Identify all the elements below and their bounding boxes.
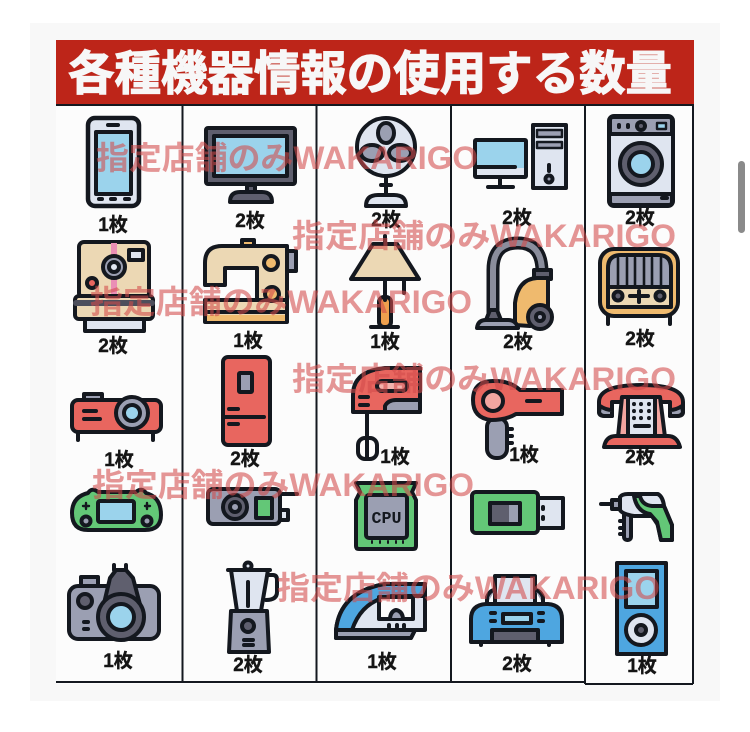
quantity labels: 2枚 [371,209,401,231]
quantity labels: 2枚 [98,335,128,357]
icon: vacuum cleaner [477,243,552,329]
panel: device grid [56,104,694,684]
quantity labels: 1枚 [103,650,133,672]
quantity labels: 2枚 [502,207,532,229]
icon: smartphone [88,118,139,206]
quantity labels: 1枚 [104,449,134,471]
icon: SLR camera [69,565,159,640]
icon: television [206,128,295,202]
quantity labels: 2枚 [502,653,532,675]
icon: desktop computer [475,125,566,188]
quantity labels: 1枚 [627,655,657,677]
icon: refrigerator [223,357,270,445]
icon: hair dryer [473,381,562,458]
icon: sewing machine [205,240,296,322]
icon: vintage radio [600,249,678,324]
icon: power drill [601,494,672,540]
watermarks: 指定店舗のみWAKARIGO [90,284,472,320]
quantity labels [98,207,657,677]
quantity labels: 2枚 [625,328,655,350]
watermarks: 指定店舗のみWAKARIGO [292,361,676,397]
title banner: 各種機器情報の使用する数量 [68,47,672,100]
watermarks: 指定店舗のみWAKARIGO [292,218,676,254]
quantity labels: 1枚 [98,214,128,236]
quantity labels: 1枚 [233,330,263,352]
icon: USB drive [472,492,563,533]
icon: instant camera [75,242,153,331]
quantity labels: 2枚 [233,654,263,676]
icon: clothes iron [336,584,425,638]
quantity labels: 1枚 [370,331,400,353]
icon: washing machine [609,116,673,206]
icon: printer [471,576,562,645]
watermarks: 指定店舗のみWAKARIGO [96,140,478,176]
quantity labels: 2枚 [230,448,260,470]
icon: desk telephone [599,385,683,447]
icon: CPU chip: CPU [372,510,402,529]
icon: blender [228,562,277,652]
icon: hand mixer [353,368,420,459]
icon: handheld game console [72,490,161,530]
watermarks: 指定店舗のみWAKARIGO [92,467,474,503]
icon: table lamp [351,236,419,327]
quantity labels: 2枚 [503,331,533,353]
quantity labels: 2枚 [625,446,655,468]
quantity labels: 2枚 [625,207,655,229]
icon: music player [617,563,666,654]
icon: camcorder [208,489,297,524]
scrollbar [738,161,745,233]
watermarks: 指定店舗のみWAKARIGO [277,570,660,606]
quantity labels: 1枚 [509,444,539,466]
watermarks [90,140,676,606]
quantity labels: 1枚 [380,446,410,468]
icon: electric fan [357,118,415,206]
quantity labels: 1枚 [367,651,397,673]
icon: projector [72,394,161,440]
icon: CPU chip [356,483,416,549]
quantity labels: 2枚 [235,210,265,232]
